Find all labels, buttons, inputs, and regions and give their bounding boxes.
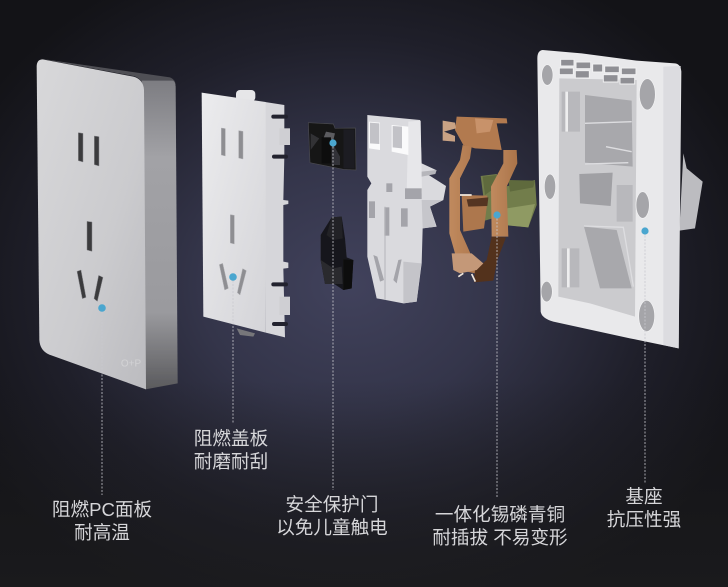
vents <box>559 59 636 84</box>
label: cover: 阻燃盖板 <box>194 428 268 449</box>
label: base <box>607 486 681 530</box>
panel: base <box>537 50 703 348</box>
panel: flame-retardant cover <box>202 90 290 337</box>
label: copper: 耐插拔 不易变形 <box>432 527 568 548</box>
copper conductor <box>443 117 517 282</box>
panel: white inner frame <box>367 115 446 303</box>
notches <box>273 117 286 324</box>
screw slots <box>541 65 655 332</box>
leader line: cover <box>229 273 237 424</box>
label: shutter: 以免儿童触电 <box>276 517 388 538</box>
recess <box>558 78 637 317</box>
label: copper <box>432 504 568 548</box>
logo mark: O+P <box>121 359 141 370</box>
upper shutter <box>308 123 356 170</box>
panel: tin-phosphor bronze contacts <box>443 117 537 282</box>
icon: socket holes on cover <box>219 128 246 295</box>
label: face plate: 阻燃PC面板 <box>52 499 152 520</box>
panel: flame-retardant PC face plate <box>37 59 178 389</box>
label: shutter: 安全保护门 <box>286 494 378 515</box>
leader line: copper <box>493 211 501 498</box>
label: copper: 一体化锡磷青铜 <box>435 504 565 525</box>
label: base: 基座 <box>625 486 663 507</box>
label: shutter <box>276 494 388 538</box>
label: face plate: 耐高温 <box>74 522 130 543</box>
label: cover: 耐磨耐刮 <box>194 451 268 472</box>
icon: socket holes on plate <box>77 133 103 301</box>
leader line: shutter <box>329 139 337 490</box>
label: face plate <box>52 499 152 543</box>
green terminal <box>481 174 537 227</box>
label: base: 抗压性强 <box>607 509 681 530</box>
leader line: face plate <box>98 304 106 495</box>
leader line: base <box>641 227 649 483</box>
label: cover <box>194 428 268 472</box>
panel: safety shutter <box>308 123 356 290</box>
lower shutter <box>321 217 353 290</box>
